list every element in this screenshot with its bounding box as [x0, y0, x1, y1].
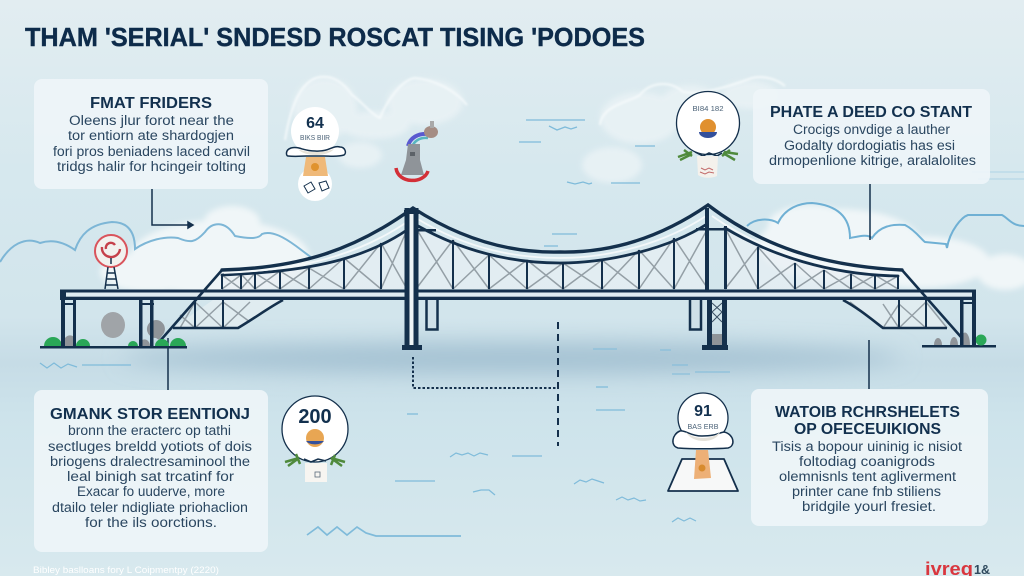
panel text: bottom right: foltodiag coanigrods — [799, 454, 935, 469]
cloud outline right — [747, 203, 1024, 248]
icon: red signal tower — [95, 235, 127, 289]
panel text: top left: fori pros beniadens laced canvil — [53, 144, 250, 159]
icon: badge 200 — [282, 396, 348, 482]
right abutment — [922, 290, 996, 348]
panel text: top left — [53, 113, 250, 174]
panel text: top right: Godalty dordogiatis has esi — [784, 138, 955, 153]
background clouds — [100, 77, 1024, 296]
panel heading: bottom left: GMANK STOR EENTIONJ — [50, 406, 250, 423]
panel heading: bottom right: OP OFECEUIKIONS — [794, 421, 941, 438]
panel: top left — [34, 79, 268, 189]
connector lines — [152, 184, 870, 446]
truss lattice — [173, 228, 947, 328]
panel text: bottom left: for the ils oorctions. — [85, 515, 217, 530]
panel: bottom right — [751, 389, 988, 526]
panel text: bottom right — [772, 439, 962, 514]
icon: tower with rainbow — [396, 121, 438, 180]
water ripples — [40, 120, 1024, 536]
panel text: bottom left: bronn the eracterc op tathi — [68, 423, 231, 438]
panel text: top right — [769, 122, 976, 168]
panel text: top left: tridgs halir for hcingeir tolting — [57, 159, 246, 174]
panel text: bottom left: sectluges breldd yotiots of dois — [48, 439, 252, 454]
main cables — [222, 205, 902, 276]
diagonals and lower chords — [160, 270, 961, 341]
panel text: bottom left: Exacar fo uuderve, more — [77, 484, 225, 499]
icon: badge top right — [676, 92, 740, 178]
panel text: bottom right: Tisis a bopour uininig ic nisiot — [772, 439, 962, 454]
panel: top right — [753, 89, 990, 184]
bridge — [40, 205, 996, 350]
panel heading: bottom right: WATOIB RCHRSHELETS — [775, 404, 960, 421]
panel: bottom left — [34, 390, 268, 552]
icon: badge 91: BAS ERB — [688, 424, 719, 431]
title: THAM 'SERIAL' SNDESD ROSCAT TISING 'PODOES — [25, 22, 645, 52]
panel heading: bottom right — [775, 404, 960, 438]
left abutment — [40, 299, 187, 348]
panel heading: top left: FMAT FRIDERS — [90, 95, 212, 112]
left tower — [402, 208, 438, 350]
panel text: bottom left: briogens dralectresaminool the — [50, 454, 250, 469]
sky band behind river — [122, 343, 902, 373]
logo — [925, 559, 990, 576]
icon: badge top right: BI84 182 — [692, 104, 724, 113]
icon: badge 200: 200 — [298, 406, 332, 428]
icon: badge 64 — [286, 107, 345, 201]
icon: badge 91 — [668, 393, 738, 491]
panel heading: top right: PHATE A DEED CO STANT — [770, 104, 973, 121]
footer source: Bibley baslloans fory L Coipmentpy (2220) — [33, 565, 219, 575]
icon: badge 64: 64 — [306, 115, 324, 132]
cloud outline left — [0, 222, 312, 262]
truss verticals — [195, 238, 926, 328]
right tower — [690, 208, 728, 350]
deck — [60, 290, 976, 300]
panel text: bottom right: printer cane fnb stiliens — [792, 484, 941, 499]
panel text: bottom left: dtailo teler ndigliate priohaclion — [52, 500, 248, 515]
panel text: bottom right: bridgile yourl fresiet. — [802, 499, 936, 514]
panel text: bottom right: olemnisnls tent agliverment — [779, 469, 956, 484]
panel text: top left: Oleens jlur forot near the — [69, 113, 234, 128]
panel text: bottom left — [48, 423, 252, 530]
icon: badge 64: BIKS BIIR — [300, 135, 330, 142]
panel text: top right: Crocigs onvdige a lauther — [793, 122, 951, 137]
icon: badge 91: 91 — [694, 403, 712, 420]
cable highlight — [224, 216, 900, 273]
panel text: top left: tor entiorn ate shardogjen — [68, 128, 234, 143]
panel text: top right: drmopenlione kitrige, aralalolites — [769, 153, 976, 168]
panel text: bottom left: leal binigh sat trcatinf for — [67, 469, 235, 484]
